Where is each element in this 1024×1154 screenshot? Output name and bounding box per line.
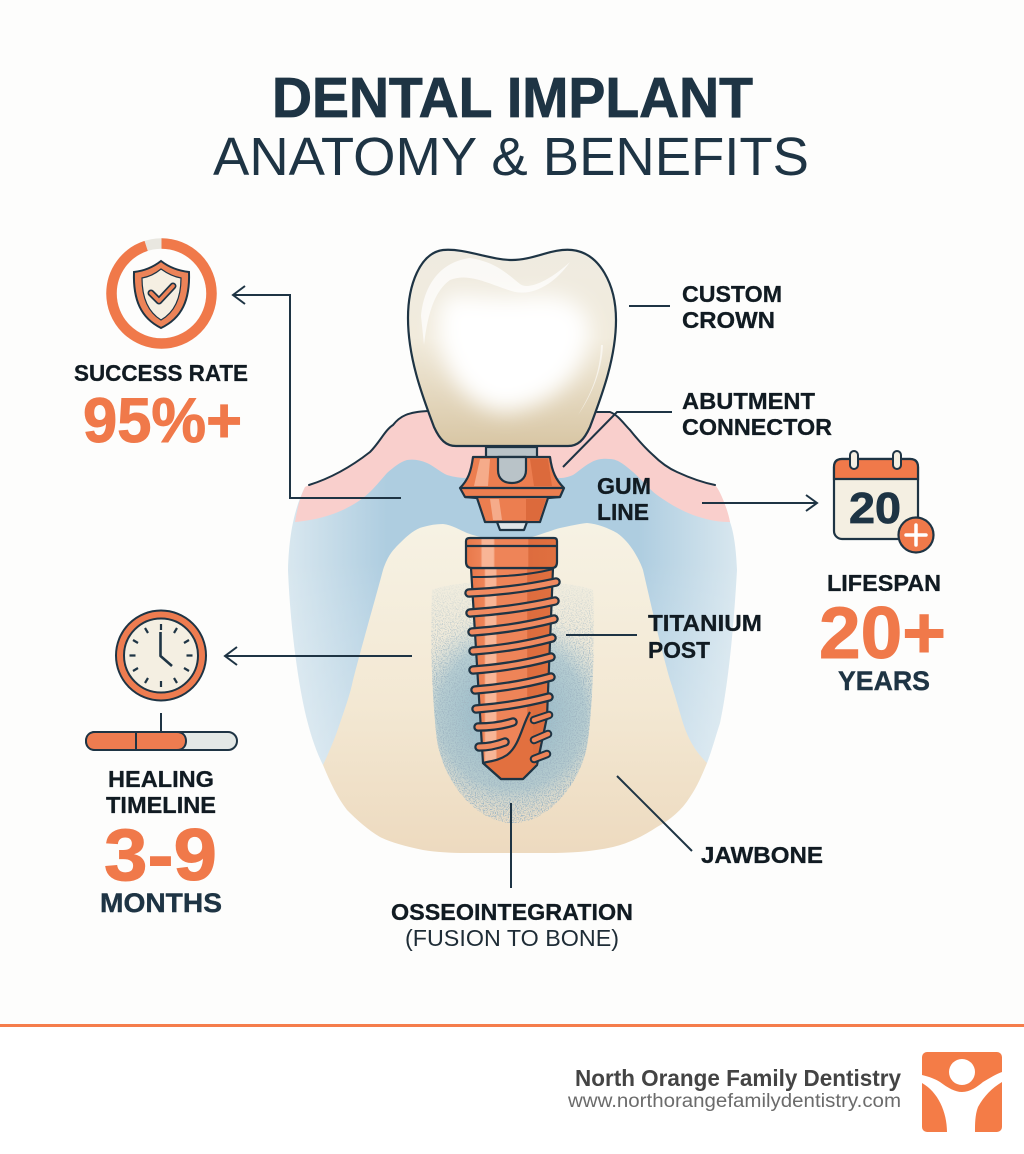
title: [213, 66, 809, 187]
soft tissue: blue layer: [288, 450, 737, 765]
panel: lifespan: [819, 451, 946, 696]
labels: CUSTOM: [682, 281, 782, 307]
post body: [471, 568, 553, 779]
right thread ends: [534, 715, 549, 759]
panel: healing timeline: [86, 610, 237, 918]
panel: lifespan: 20+: [819, 593, 946, 674]
progress bar: [86, 713, 237, 750]
custom crown: [408, 250, 616, 446]
labels: OSSEOINTEGRATION: [391, 899, 633, 925]
labels: ABUTMENT: [682, 388, 816, 414]
icon: clock: [116, 610, 206, 700]
labels: LINE: [597, 499, 649, 525]
panel: healing timeline: MONTHS: [100, 888, 222, 918]
labels: GUM: [597, 473, 651, 499]
website: www.northorangefamilydentistry.com: [567, 1091, 901, 1112]
arrow: to healing timeline: [225, 647, 412, 665]
panel: healing timeline: 3-9: [104, 815, 217, 896]
gum outline: [309, 411, 715, 485]
labels: JAWBONE: [701, 842, 823, 868]
panel: lifespan: LIFESPAN: [827, 570, 941, 596]
panel: healing timeline: HEALING: [108, 766, 214, 792]
panel: lifespan: YEARS: [838, 666, 930, 696]
leader lines: [511, 306, 692, 888]
apical flute: [483, 712, 537, 779]
arrow: to success rate: [233, 286, 401, 498]
labels: CONNECTOR: [682, 414, 832, 440]
logo: [922, 1052, 1002, 1132]
abutment connector: [460, 447, 564, 530]
panel: success rate: SUCCESS RATE: [74, 360, 248, 386]
titanium post: [466, 538, 557, 779]
title: DENTAL IMPLANT: [272, 66, 753, 130]
icon: shield with check: [134, 261, 189, 328]
icon: calendar: [834, 451, 934, 552]
jawbone: [323, 523, 707, 853]
gum tissue: [295, 411, 730, 522]
panel: success rate: 95%+: [83, 386, 242, 456]
screw threads: [469, 569, 556, 747]
labels: [391, 281, 832, 951]
progress ring: [112, 244, 212, 344]
panel: healing timeline: TIMELINE: [106, 792, 216, 818]
labels: (FUSION TO BONE): [405, 925, 619, 951]
practice name: North Orange Family Dentistry: [575, 1065, 901, 1091]
footer: [0, 1024, 1024, 1154]
osseointegration stipple: [431, 581, 594, 823]
labels: POST: [648, 637, 711, 663]
labels: TITANIUM: [648, 610, 762, 636]
arrow: to lifespan: [702, 495, 817, 511]
labels: CROWN: [682, 307, 775, 333]
icon: calendar: 20: [849, 484, 901, 533]
post head: [466, 538, 557, 568]
jaw cross-section illustration: [288, 411, 737, 853]
panel: success rate: [74, 244, 248, 456]
title: ANATOMY & BENEFITS: [213, 127, 809, 187]
